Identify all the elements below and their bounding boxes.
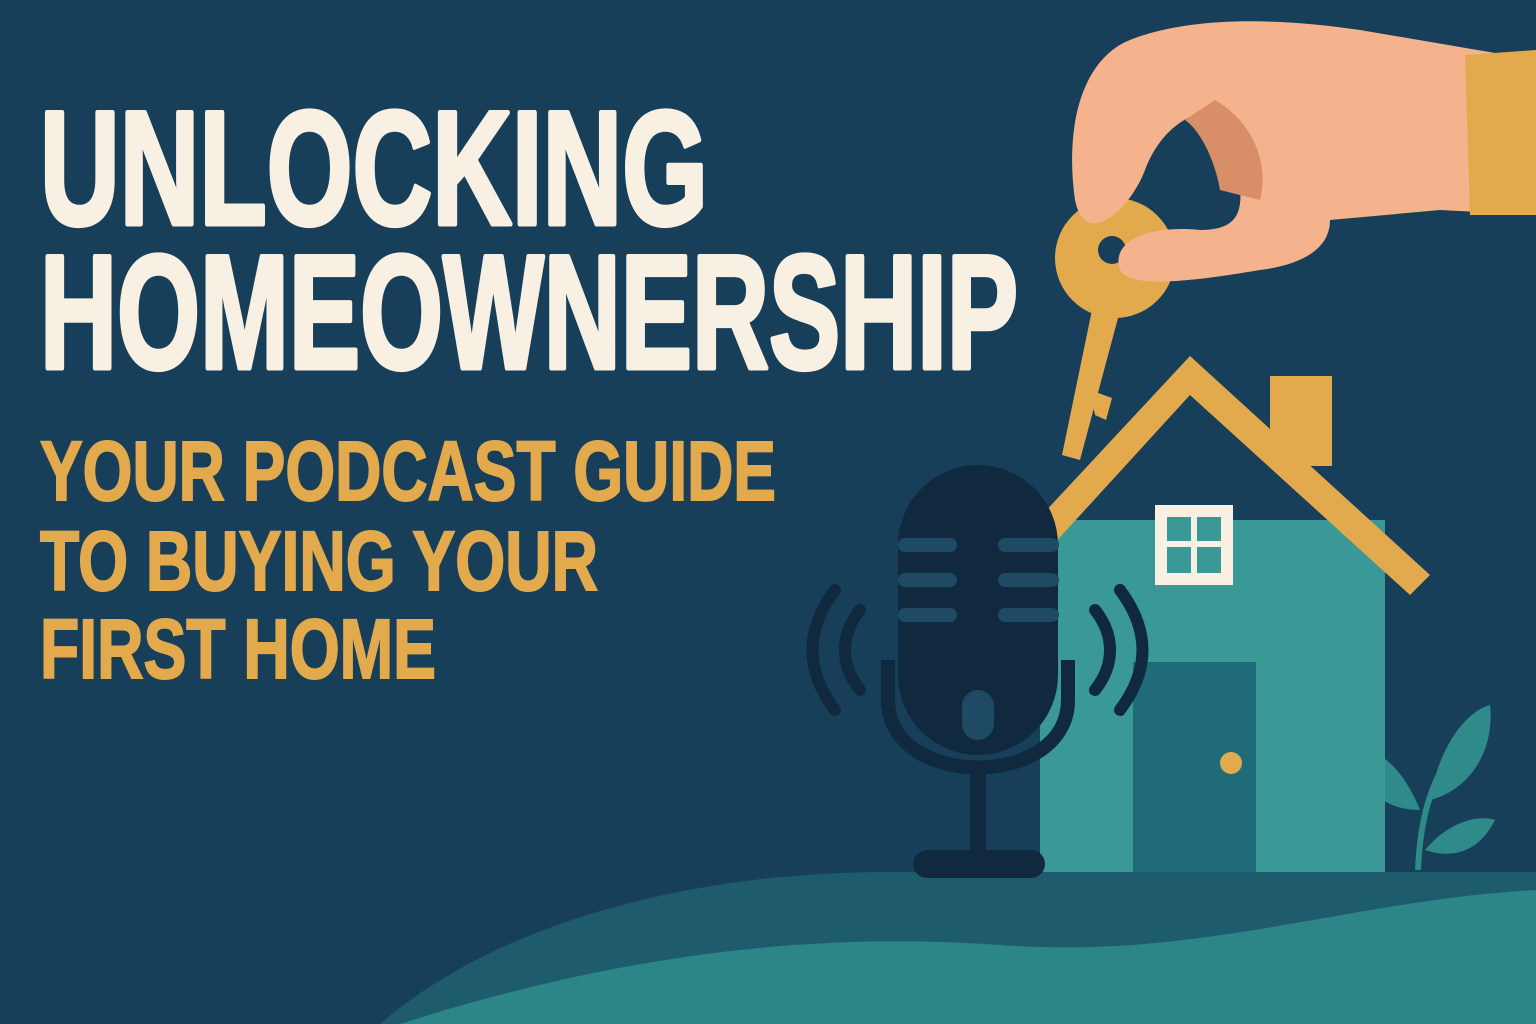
title: UNLOCKING xyxy=(40,78,708,259)
subtitle xyxy=(40,424,776,696)
title xyxy=(40,78,1018,403)
plant xyxy=(1355,705,1495,870)
ground hills xyxy=(380,872,1536,1024)
door xyxy=(1133,662,1256,872)
hand xyxy=(1072,21,1536,282)
sound waves xyxy=(812,590,1142,710)
subtitle: TO BUYING YOUR xyxy=(40,514,598,608)
subtitle: FIRST HOME xyxy=(40,602,436,696)
subtitle: YOUR PODCAST GUIDE xyxy=(40,424,776,518)
title: HOMEOWNERSHIP xyxy=(40,222,1018,403)
window xyxy=(1155,505,1233,585)
key xyxy=(1055,198,1175,460)
house xyxy=(1000,356,1430,872)
microphone xyxy=(812,465,1142,878)
